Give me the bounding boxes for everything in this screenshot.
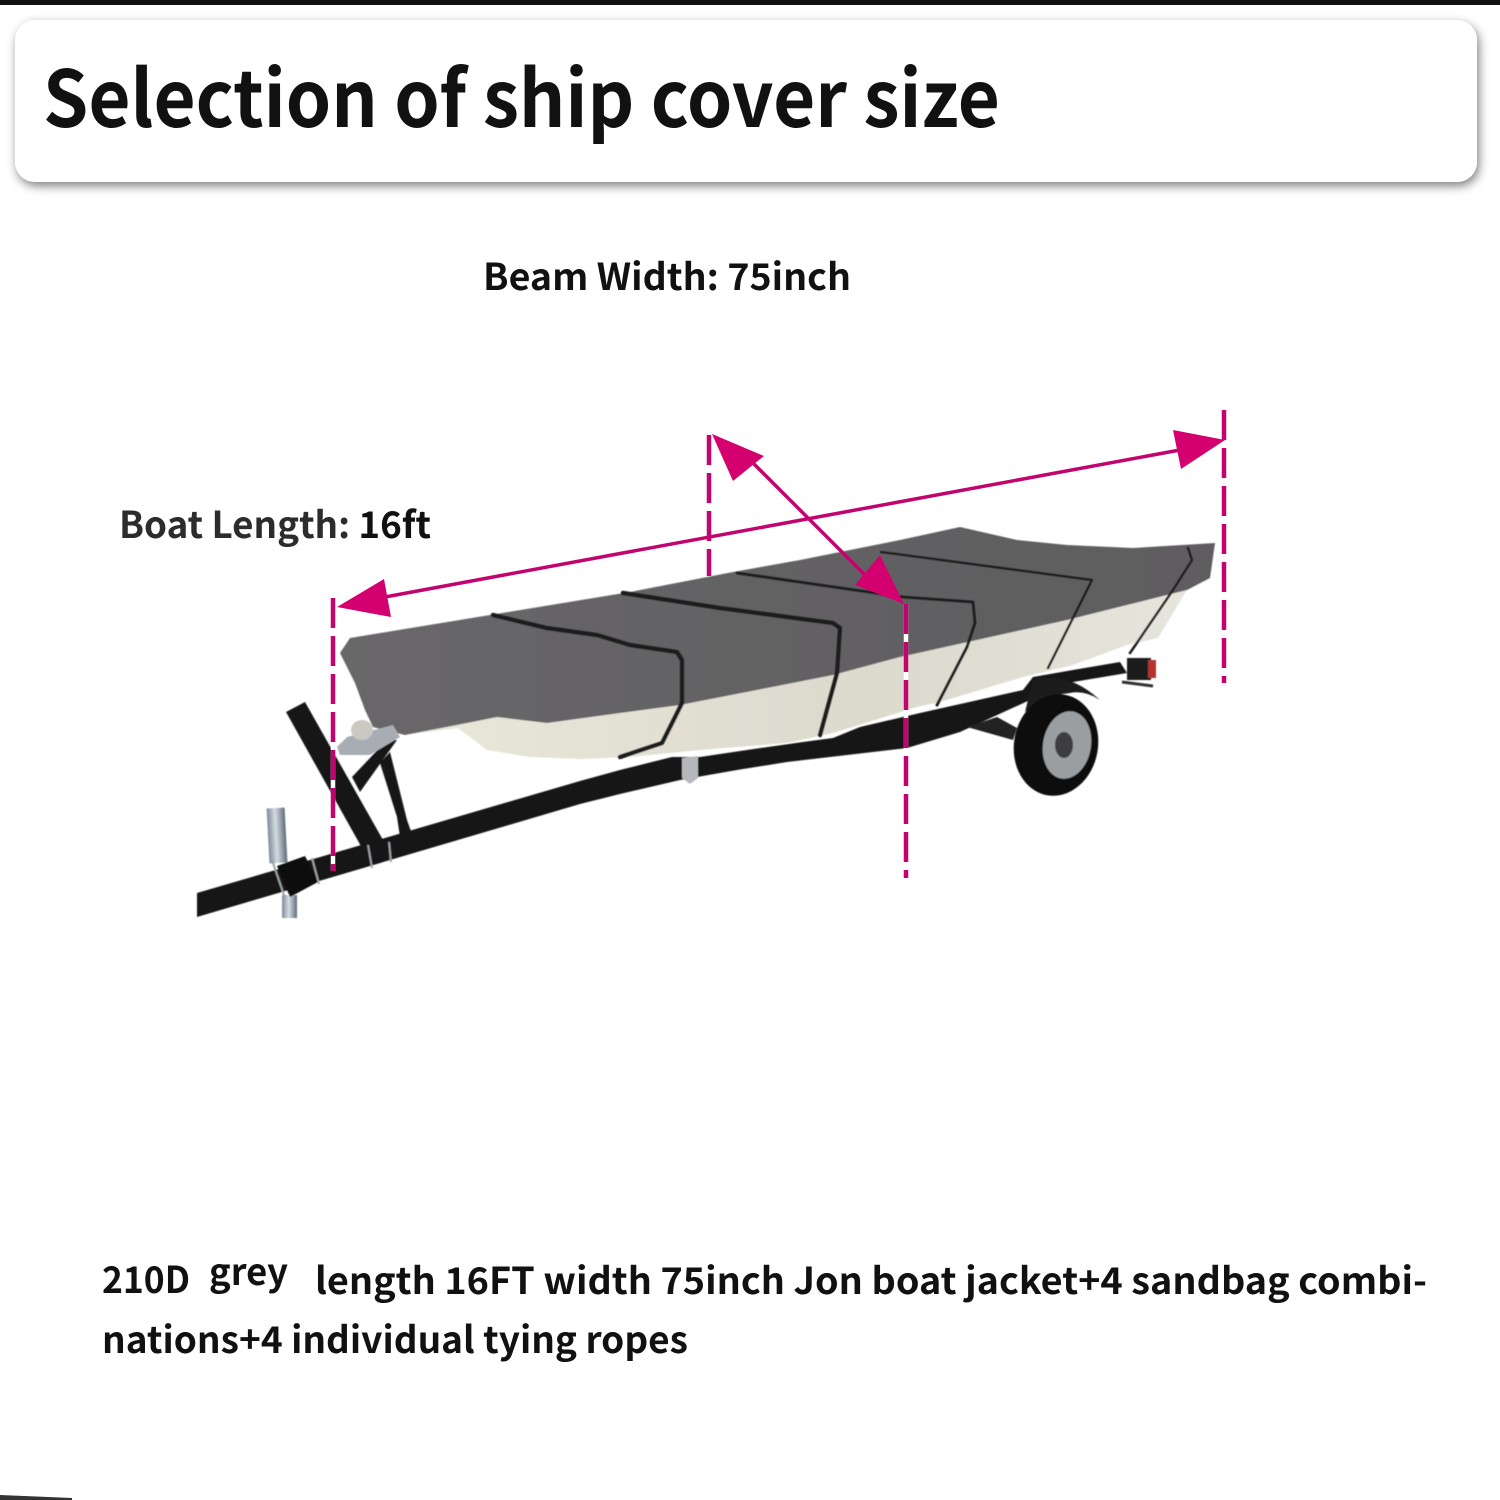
dashed guide lines: [333, 410, 1224, 878]
product description: length 16FT width 75inch Jon boat jacket+4 sandbag combi-: [315, 1251, 1427, 1305]
winch stand: [286, 702, 413, 848]
tail light: [1122, 658, 1156, 686]
product description: 210D: [102, 1250, 190, 1304]
title: Selection of ship cover size: [43, 38, 1000, 150]
bottom-left corner mark: [0, 1495, 72, 1500]
boat hull: [405, 580, 1187, 759]
beam arrow: [712, 434, 904, 604]
coupler jack post: [267, 808, 391, 918]
frame bracket: [682, 756, 698, 784]
top black edge bar: [0, 0, 1500, 5]
axle brace: [967, 717, 1017, 740]
boat cover: [340, 527, 1215, 735]
boat on trailer illustration: [197, 527, 1215, 918]
measurement arrows: [333, 410, 1225, 878]
product description: nations+4 individual tying ropes: [102, 1310, 688, 1364]
length arrow: [337, 430, 1225, 617]
label: beam width: Beam Width: 75inch: [483, 247, 851, 301]
title card: [15, 20, 1477, 182]
label: boat length: Boat Length: 16ft: [119, 495, 431, 549]
tie-down straps: [493, 548, 1192, 757]
product description: grey: [209, 1242, 288, 1296]
trailer frame: [197, 662, 1127, 917]
wheel: [1006, 678, 1106, 803]
product description: [102, 1242, 1427, 1364]
